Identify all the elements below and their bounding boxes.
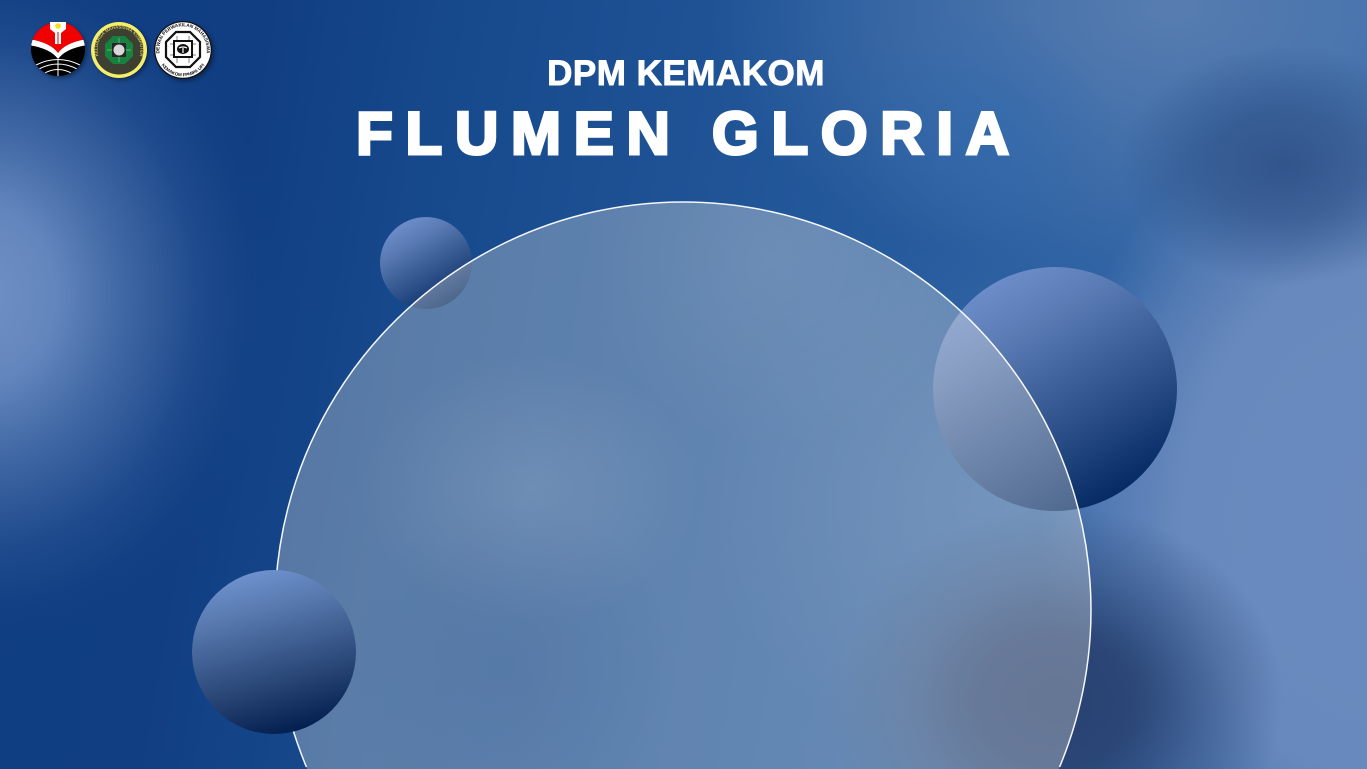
heading: DPM KEMAKOM: DPM KEMAKOM xyxy=(547,54,825,93)
sphere: large right xyxy=(933,267,1177,511)
logo: KMK xyxy=(91,22,151,82)
logo: DPM xyxy=(154,21,216,83)
logo: DPM: DEWAN PERWAKILAN MAHASISWA xyxy=(156,23,210,54)
logos xyxy=(31,21,216,83)
title: FLUMEN GLORIA: FLUMEN GLORIA xyxy=(356,100,1022,167)
glass circle xyxy=(276,201,1092,769)
sphere: bottom-left xyxy=(192,570,356,734)
logo: KMK: KELUARGA MAHASISWA KOMPUTER xyxy=(94,25,144,56)
logo: UPI xyxy=(28,18,88,76)
sphere: small top-left xyxy=(380,217,472,309)
logo: DPM: KEMAKOM FPMIPA UPI xyxy=(162,63,204,76)
